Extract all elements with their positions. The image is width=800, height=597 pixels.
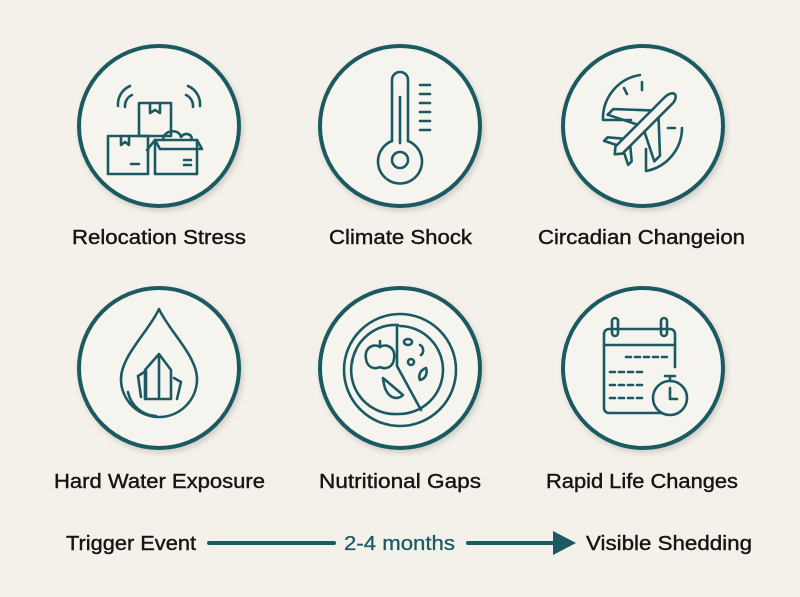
timeline [66, 531, 752, 555]
label: Circadian Changeion [538, 227, 745, 249]
panel: climate shock [320, 46, 480, 249]
panel: relocation stress [72, 46, 246, 249]
label: Hard Water Exposure [54, 471, 265, 493]
label: Relocation Stress [72, 227, 246, 249]
label: Rapid Life Changes [546, 471, 738, 493]
label: Nutritional Gaps [319, 471, 481, 493]
icon: boxes [108, 86, 202, 174]
timeline: Visible Shedding [586, 533, 752, 555]
icon: plate [344, 314, 456, 426]
timeline: 2-4 months [344, 533, 455, 555]
timeline: Trigger Event [66, 533, 196, 555]
label: Climate Shock [329, 227, 473, 249]
arrow [468, 531, 576, 555]
icon: thermometer [378, 72, 430, 183]
icon: calendar with stopwatch [604, 318, 687, 415]
icon: airplane clock [591, 71, 698, 178]
panel: rapid life changes [546, 288, 738, 493]
panel: circadian [538, 46, 745, 249]
panel: hard water [54, 288, 265, 493]
icon: drop with crystals [121, 309, 197, 417]
panel: nutritional gaps [319, 288, 481, 493]
